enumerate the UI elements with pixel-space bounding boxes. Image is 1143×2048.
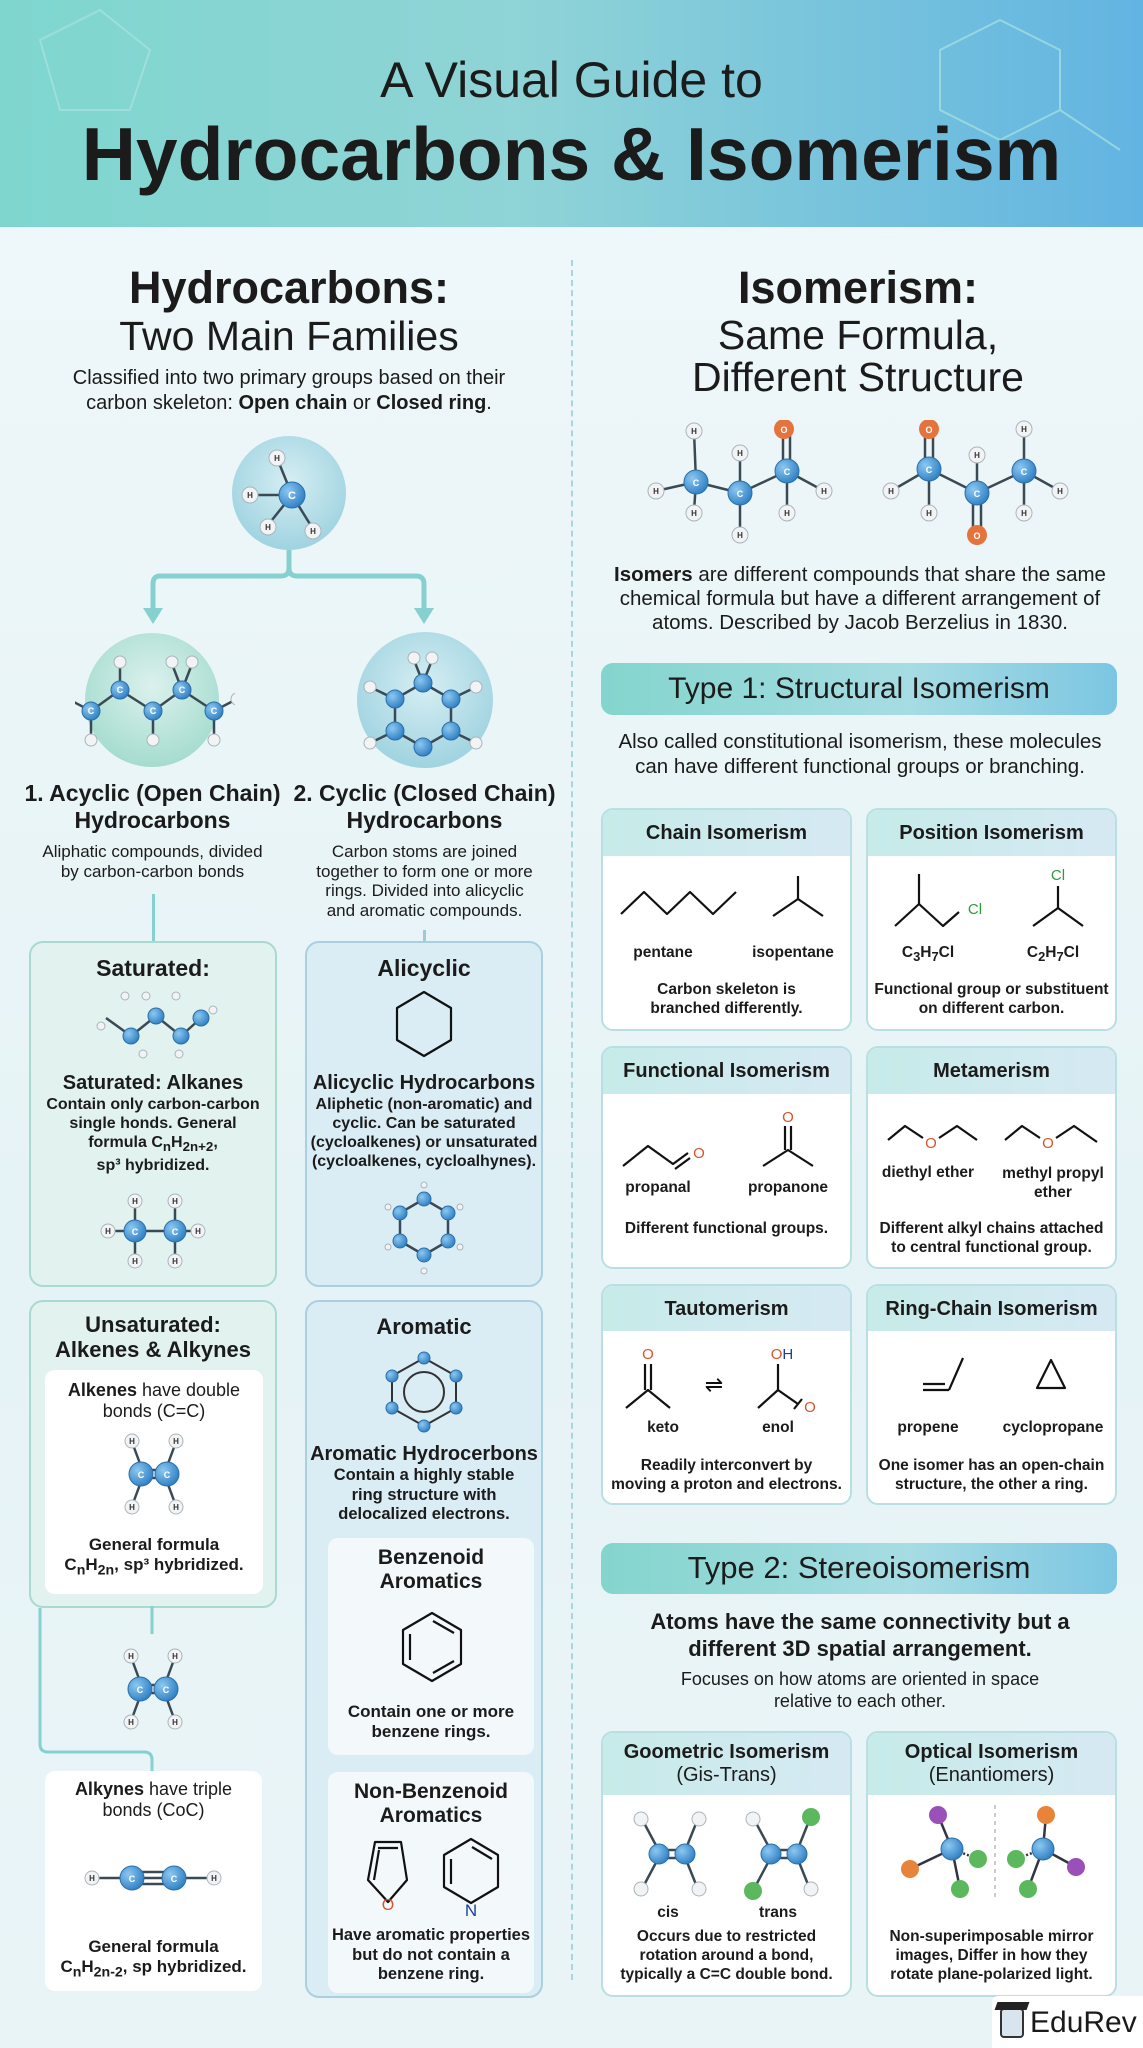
connector to alkynes — [38, 1606, 154, 1771]
heading: unsaturated — [55, 1312, 251, 1362]
text: type 2 desc: Atoms have the same connectivity but a — [650, 1609, 1070, 1634]
icon: ethene middle: C — [163, 1685, 170, 1695]
card: tautomerism — [601, 1284, 852, 1505]
icon: methane: C — [288, 490, 296, 502]
card: ring-chain isomerism — [866, 1284, 1117, 1505]
heading bar: type 1: Type 1: Structural Isomerism — [668, 672, 1050, 705]
icon: ethane: C — [132, 1227, 139, 1237]
card: alkynes: Alkynes have triple — [75, 1779, 232, 1799]
icon: ethane: H — [195, 1227, 201, 1236]
card: geometric isomerism: typically a C=C double bond. — [620, 1966, 833, 1983]
card: metamerism: ether — [1034, 1184, 1072, 1201]
icon: ethene: C — [164, 1470, 171, 1480]
card: metamerism: diethyl ether — [882, 1164, 974, 1181]
card: benzenoid: Benzenoid — [378, 1546, 484, 1569]
icon: ethene — [124, 1434, 184, 1514]
icon: ethene: H — [129, 1503, 135, 1512]
card: tautomerism: OH — [771, 1346, 793, 1363]
card: non-benzenoid: Have aromatic properties — [332, 1926, 530, 1944]
logo: EduRev: EduRev — [1030, 2006, 1137, 2039]
card: chain isomerism: Chain Isomerism — [646, 822, 807, 844]
card: tautomerism: Readily interconvert by — [641, 1457, 812, 1474]
card: functional isomerism: Different functional groups. — [625, 1220, 828, 1237]
icon: ethane: H — [105, 1227, 111, 1236]
card: position isomerism: C3H7Cl — [902, 944, 954, 964]
heading bar: type 2 — [601, 1543, 1117, 1594]
icon: isomer molecules: H — [784, 509, 790, 518]
text: alkanes: Saturated: Alkanes — [63, 1072, 243, 1094]
text: acyclic desc — [42, 842, 263, 881]
card: position isomerism: Functional group or substituent — [874, 981, 1109, 998]
card: metamerism: Metamerism — [933, 1060, 1050, 1082]
text: alkanes: sp³ hybridized. — [97, 1157, 209, 1174]
icon: cis trans — [634, 1808, 820, 1900]
card: geometric isomerism: (Gis-Trans) — [676, 1764, 777, 1786]
icon: isomer molecules: C — [784, 467, 791, 477]
icon: isomer molecules: H — [691, 427, 697, 436]
text: cyclic desc — [316, 842, 533, 920]
icon: cyclohexane — [396, 990, 452, 1058]
right heading: Isomerism: — [738, 262, 978, 313]
card: geometric isomerism: cis — [657, 1904, 679, 1921]
heading: unsaturated: Unsaturated: — [85, 1312, 221, 1337]
text: aromatic desc: ring structure with — [352, 1486, 496, 1504]
text: type 1 desc — [618, 730, 1102, 778]
icon: acyclic molecule: C — [88, 706, 95, 716]
icon: isomer molecules: H — [691, 509, 697, 518]
text: aromatic desc: delocalized electrons. — [338, 1505, 510, 1523]
icon: ethane: H — [172, 1197, 178, 1206]
card: metamerism: O — [925, 1135, 937, 1152]
card: alkenes: CnH2n, sp³ hybridized. — [64, 1555, 244, 1578]
card: position isomerism: on different carbon. — [919, 1000, 1064, 1017]
divider — [571, 260, 573, 1980]
card: ring-chain isomerism: structure, the other a ring. — [895, 1476, 1088, 1493]
icon: ethyne: C — [129, 1874, 136, 1884]
text: type 1 desc: Also called constitutional isomerism, these molecules — [618, 730, 1102, 753]
text: cyclic desc: and aromatic compounds. — [327, 900, 522, 920]
heading: acyclic: Hydrocarbons — [75, 807, 230, 833]
icon: ethane: H — [132, 1257, 138, 1266]
panel: saturated — [29, 941, 277, 1287]
card: optical isomerism: Optical Isomerism — [905, 1741, 1078, 1763]
icon: isomer molecules: H — [1057, 487, 1063, 496]
card: geometric isomerism: rotation around a bond, — [640, 1947, 813, 1964]
icon: ethane: C — [172, 1227, 179, 1237]
card: alkynes: CnH2n-2, sp hybridized. — [60, 1957, 247, 1980]
card: functional isomerism: O — [693, 1145, 705, 1162]
text: alkanes: single honds. General — [69, 1115, 237, 1132]
icon: furan and pyridine: O — [382, 1897, 394, 1914]
icon: isomer molecules: C — [974, 489, 981, 499]
panel: aromatic — [305, 1300, 543, 1998]
card: ring-chain isomerism: Ring-Chain Isomerism — [885, 1298, 1098, 1320]
card: alkenes — [45, 1370, 263, 1594]
icon: ethene middle: C — [137, 1685, 144, 1695]
card: alkenes: Alkenes have double — [68, 1380, 240, 1400]
text: isomers definition: Isomers are different compounds that share the same — [614, 563, 1106, 586]
card: geometric isomerism: Goometric Isomerism — [624, 1741, 829, 1763]
card: metamerism: methyl propyl — [1002, 1165, 1104, 1182]
card: ring-chain isomerism: One isomer has an open-chain — [879, 1457, 1104, 1474]
card: tautomerism: O — [642, 1346, 654, 1363]
icon: ethane — [100, 1194, 206, 1268]
text: aromatic desc: Contain a highly stable — [334, 1466, 514, 1484]
text: alicyclic desc: (cycloalkenes) or unsaturated — [311, 1134, 537, 1151]
logo: EduRev — [992, 1996, 1143, 2048]
card: position isomerism — [866, 808, 1117, 1031]
card: benzenoid — [328, 1538, 534, 1755]
header band — [0, 0, 1143, 227]
heading: saturated: Saturated: — [96, 955, 210, 981]
icon: methane: H — [310, 527, 316, 536]
icon: ethene middle — [124, 1648, 182, 1730]
card: geometric isomerism: trans — [759, 1904, 797, 1921]
left intro text — [73, 367, 505, 414]
icon: acyclic molecule — [75, 633, 235, 767]
icon: isomer molecules: H — [974, 451, 980, 460]
left heading — [119, 262, 459, 359]
card: non-benzenoid: benzene ring. — [378, 1965, 484, 1983]
icon: isomer molecules: H — [1021, 425, 1027, 434]
heading: alicyclic: Alicyclic — [377, 955, 471, 981]
icon: furan and pyridine — [366, 1838, 500, 1918]
icon: ethyne: H — [89, 1874, 95, 1883]
icon: ethene middle: H — [172, 1718, 178, 1727]
title — [82, 52, 1061, 196]
card: metamerism: to central functional group. — [891, 1239, 1092, 1256]
icon: ethane: H — [132, 1197, 138, 1206]
text: type 2 desc: different 3D spatial arrangement. — [688, 1636, 1032, 1661]
text: aromatic desc — [310, 1443, 538, 1523]
text: cyclic desc: together to form one or more — [316, 862, 533, 880]
card: optical isomerism: (Enantiomers) — [929, 1764, 1054, 1786]
icon: methane: H — [265, 523, 271, 532]
icon: butane — [96, 992, 218, 1058]
card: functional isomerism: Functional Isomerism — [623, 1060, 830, 1082]
icon: isomer molecules — [648, 420, 1068, 545]
card: optical isomerism: rotate plane-polarized light. — [890, 1966, 1093, 1983]
text: cyclic desc: Carbon stoms are joined — [332, 842, 517, 861]
icon: ethyne — [84, 1866, 222, 1890]
card: tautomerism: enol — [762, 1419, 794, 1436]
text: alicyclic desc: cyclic. Can be saturated — [332, 1115, 516, 1132]
icon: isomer molecules: H — [737, 531, 743, 540]
icon: methane: H — [247, 491, 253, 500]
text: alicyclic desc — [311, 1072, 537, 1170]
icon: isomer molecules: C — [1021, 467, 1028, 477]
icon: ethene: H — [173, 1503, 179, 1512]
card: geometric isomerism: Occurs due to restricted — [637, 1928, 816, 1945]
icon: isomer molecules: O — [780, 425, 788, 435]
title: A Visual Guide to — [380, 52, 763, 108]
icon: ethene: H — [173, 1437, 179, 1446]
card: alkenes: General formula — [89, 1535, 219, 1554]
card: tautomerism: O — [804, 1399, 816, 1416]
card: alkynes: bonds (CoC) — [102, 1800, 205, 1820]
text: type 1 desc: can have different functional groups or branching. — [635, 755, 1085, 778]
heading bar: type 1 — [601, 663, 1117, 715]
card: metamerism — [866, 1046, 1117, 1269]
text: relative to each other. — [774, 1691, 946, 1711]
left heading: Two Main Families — [119, 313, 459, 359]
icon: isomer molecules: H — [737, 449, 743, 458]
card: non-benzenoid: Non-Benzenoid — [354, 1780, 508, 1803]
heading: unsaturated: Alkenes & Alkynes — [55, 1337, 251, 1362]
card: functional isomerism — [601, 1046, 852, 1269]
icon: acyclic molecule: C — [211, 706, 218, 716]
icon: isomer molecules: H — [888, 487, 894, 496]
icon: isomer molecules: O — [973, 531, 981, 541]
text: acyclic desc: Aliphatic compounds, divided — [42, 842, 263, 861]
card: metamerism: Different alkyl chains attached — [880, 1220, 1103, 1237]
card: benzenoid: Contain one or more — [348, 1702, 514, 1721]
icon: ethene middle: H — [172, 1652, 178, 1661]
icon: isomer molecules: H — [821, 487, 827, 496]
card: alkynes: General formula — [88, 1937, 219, 1956]
icon: cyclic molecule — [357, 632, 493, 768]
card: functional isomerism: propanal — [625, 1179, 691, 1196]
icon: methane: H — [274, 454, 280, 463]
icon: isomer molecules: C — [737, 489, 744, 499]
text: alkanes: Contain only carbon-carbon — [46, 1096, 260, 1113]
right heading: Same Formula, — [718, 312, 998, 358]
icon: acyclic molecule: C — [117, 685, 124, 695]
card: position isomerism: Cl — [1051, 867, 1065, 884]
text: alicyclic desc: Aliphetic (non-aromatic) and — [316, 1096, 532, 1113]
card: chain isomerism: pentane — [633, 944, 693, 961]
icon: ethene middle: H — [128, 1718, 134, 1727]
left heading: Hydrocarbons: — [129, 262, 449, 313]
card: benzenoid: Aromatics — [380, 1570, 482, 1593]
heading: cyclic: 2. Cyclic (Closed Chain) — [293, 780, 556, 806]
card: functional isomerism: propanone — [748, 1179, 828, 1196]
card: position isomerism: Position Isomerism — [899, 822, 1084, 844]
card: tautomerism: moving a proton and electrons. — [611, 1476, 842, 1493]
icon: ethene middle: H — [128, 1652, 134, 1661]
card: tautomerism: keto — [647, 1419, 679, 1436]
icon: ethyne: C — [171, 1874, 178, 1884]
card: ring-chain isomerism: propene — [897, 1419, 959, 1436]
card: ring-chain isomerism: cyclopropane — [1003, 1419, 1103, 1436]
card: chain isomerism — [601, 808, 852, 1031]
card: chain isomerism: branched differently. — [650, 1000, 803, 1017]
card: optical isomerism: images, Differ in how they — [895, 1947, 1088, 1964]
text: aromatic desc: Aromatic Hydrocerbons — [310, 1443, 538, 1465]
right heading: Different Structure — [692, 354, 1024, 400]
card: position isomerism: C2H7Cl — [1027, 944, 1079, 964]
card: non-benzenoid: but do not contain a — [352, 1946, 510, 1964]
text: alicyclic desc: Alicyclic Hydrocarbons — [313, 1072, 535, 1094]
text: type 2 desc — [650, 1609, 1070, 1661]
icon: isomer molecules: H — [653, 487, 659, 496]
card: non-benzenoid — [328, 1772, 534, 1993]
left intro text: carbon skeleton: Open chain or Closed ring. — [86, 392, 492, 414]
card: alkenes: bonds (C=C) — [103, 1401, 205, 1421]
icon: acyclic molecule: C — [179, 685, 186, 695]
arrows: branch — [143, 550, 434, 624]
card: non-benzenoid: Aromatics — [380, 1804, 482, 1827]
card: alkynes — [45, 1771, 262, 1991]
icon: benzene — [402, 1612, 462, 1682]
text: isomers definition — [614, 563, 1106, 634]
icon: methane — [232, 436, 346, 550]
heading: cyclic: Hydrocarbons — [347, 807, 502, 833]
heading bar: type 2: Type 2: Stereoisomerism — [688, 1550, 1030, 1585]
heading: cyclic — [293, 780, 556, 833]
right heading — [692, 262, 1024, 400]
icon: acyclic molecule: C — [150, 706, 157, 716]
left intro text: Classified into two primary groups based on their — [73, 367, 505, 389]
text: alicyclic desc: (cycloalkenes, cycloalhynes). — [312, 1153, 536, 1170]
card: chain isomerism: Carbon skeleton is — [657, 981, 796, 998]
text: acyclic desc: by carbon-carbon bonds — [61, 862, 244, 881]
icon: enantiomers — [901, 1805, 1085, 1898]
heading: acyclic — [24, 780, 281, 833]
card: metamerism: O — [1042, 1135, 1054, 1152]
icon: ethane: H — [172, 1257, 178, 1266]
text: cyclic desc: rings. Divided into alicyclic — [325, 881, 524, 900]
icon: ethene: H — [129, 1437, 135, 1446]
icon: isomer molecules: H — [926, 509, 932, 518]
icon: isomer molecules: O — [925, 425, 933, 435]
icon: ethene: C — [138, 1470, 145, 1480]
text: isomers definition: chemical formula but have a different arrangement of — [620, 587, 1100, 610]
panel: alicyclic — [305, 941, 543, 1287]
card: chain isomerism: isopentane — [752, 944, 834, 961]
card: optical isomerism — [866, 1731, 1117, 1997]
title: Hydrocarbons & Isomerism — [82, 112, 1061, 196]
card: optical isomerism: Non-superimposable mirror — [889, 1928, 1094, 1945]
heading: aromatic: Aromatic — [376, 1314, 472, 1339]
text: alkanes — [46, 1072, 260, 1174]
text: Focuses on how atoms are oriented in space — [681, 1669, 1039, 1689]
card: tautomerism: Tautomerism — [664, 1298, 789, 1320]
card: functional isomerism: O — [782, 1109, 794, 1126]
card: position isomerism: Cl — [968, 901, 982, 918]
card: benzenoid: benzene rings. — [371, 1722, 491, 1741]
icon: ring molecule — [384, 1182, 464, 1274]
text: isomers definition: atoms. Described by Jacob Berzelius in 1830. — [652, 611, 1068, 634]
panel: unsaturated — [29, 1300, 277, 1608]
icon: ethyne: H — [211, 1874, 217, 1883]
icon: isomer molecules: C — [926, 465, 933, 475]
text: alkanes: formula CnH2n+2, — [88, 1134, 218, 1154]
icon: aromatic ring — [386, 1352, 462, 1432]
heading: acyclic: 1. Acyclic (Open Chain) — [24, 780, 281, 806]
icon: isomer molecules: C — [693, 478, 700, 488]
icon: isomer molecules: H — [1021, 509, 1027, 518]
card: geometric isomerism — [601, 1731, 852, 1997]
card: tautomerism: ⇌ — [705, 1372, 723, 1397]
